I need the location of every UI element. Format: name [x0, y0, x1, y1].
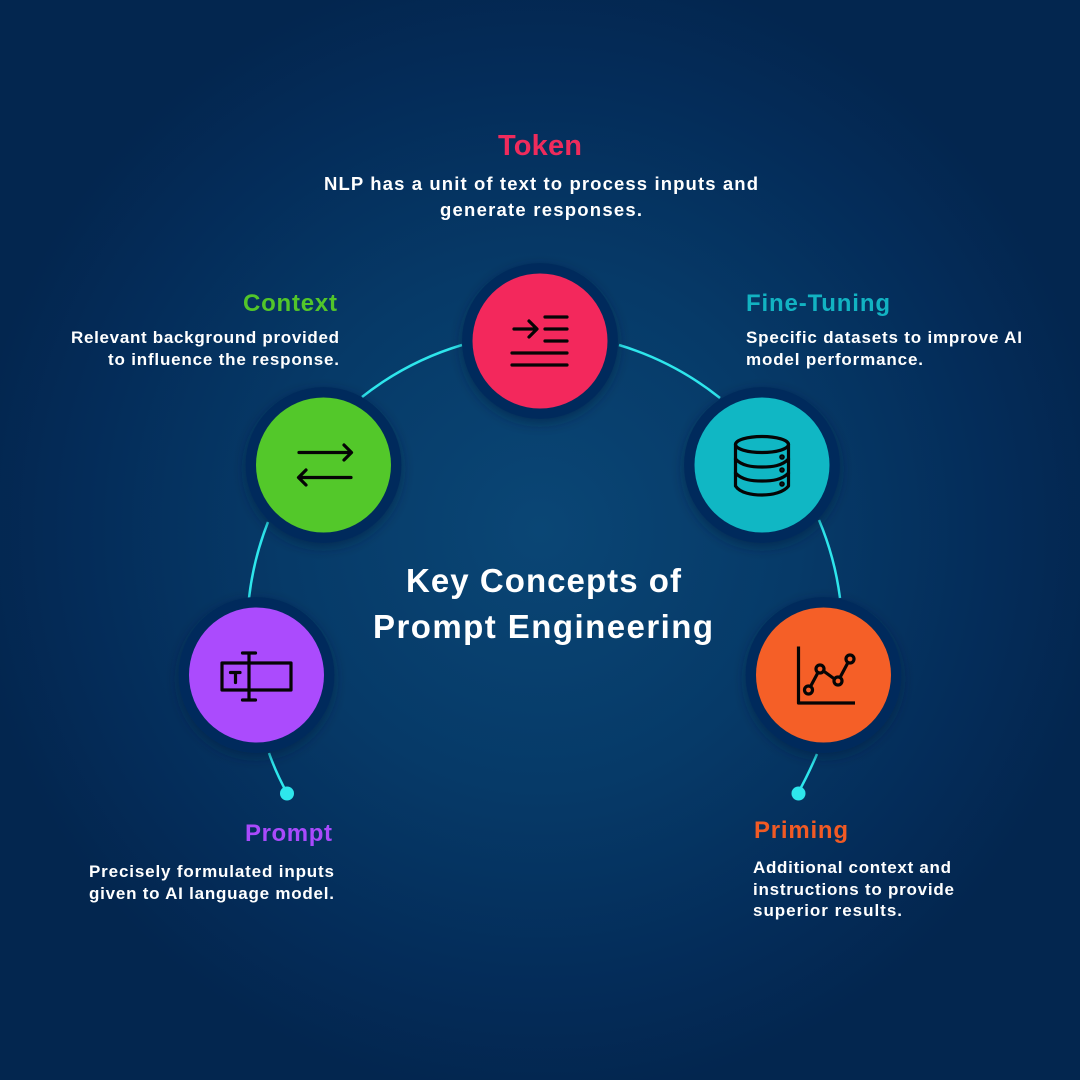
description: fine-tuning: model performance.	[746, 350, 923, 369]
title: Key Concepts of	[406, 562, 682, 599]
description: token	[324, 173, 758, 220]
panel: priming	[746, 597, 954, 920]
icon: indent lines	[512, 317, 567, 365]
description: priming: superior results.	[753, 901, 902, 920]
description: priming	[753, 858, 954, 920]
panel: token	[324, 130, 758, 419]
heading: prompt: Prompt	[245, 820, 332, 847]
description: context: Relevant background provided	[71, 328, 339, 347]
priming end dot	[792, 786, 806, 800]
heading: context: Context	[243, 290, 337, 317]
description: context: to influence the response.	[108, 350, 339, 369]
prompt end dot	[280, 786, 294, 800]
description: token: generate responses.	[440, 199, 642, 220]
description: prompt	[89, 862, 334, 903]
description: fine-tuning: Specific datasets to improve AI	[746, 328, 1022, 347]
description: token: NLP has a unit of text to process inputs and	[324, 173, 758, 194]
icon: swap arrows	[298, 445, 352, 485]
description: priming: instructions to provide	[753, 880, 954, 899]
heading: fine-tuning: Fine-Tuning	[746, 290, 890, 317]
panel: fine-tuning	[684, 290, 1022, 543]
description: priming: Additional context and	[753, 858, 951, 877]
icon: database	[736, 436, 788, 495]
panel: prompt	[89, 597, 334, 903]
connecting arc segments	[249, 345, 840, 793]
node: token	[462, 263, 618, 419]
heading: token: Token	[498, 130, 582, 162]
title: Prompt Engineering	[373, 608, 713, 645]
description: context	[71, 328, 339, 369]
node: priming	[746, 597, 902, 753]
node: prompt	[178, 597, 334, 753]
description: prompt: Precisely formulated inputs	[89, 862, 334, 881]
node: fine-tuning	[684, 387, 840, 543]
title	[373, 562, 713, 645]
heading: priming: Priming	[754, 817, 848, 844]
icon: text cursor box	[222, 653, 291, 700]
description: fine-tuning	[746, 328, 1022, 369]
node: context	[246, 387, 402, 543]
panel: context	[71, 290, 402, 543]
icon: line chart	[798, 646, 855, 703]
description: prompt: given to AI language model.	[89, 884, 334, 903]
